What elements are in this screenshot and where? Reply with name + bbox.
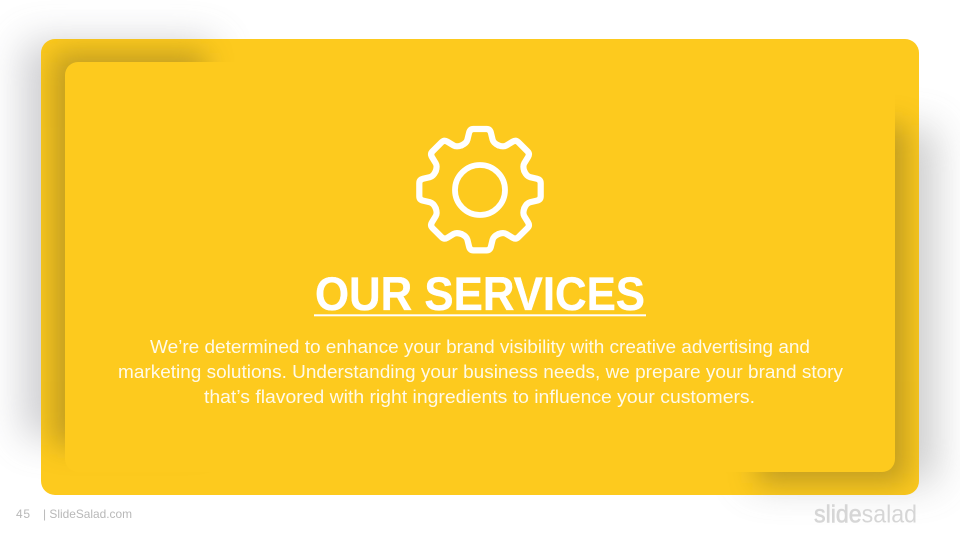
icon: gear [419,129,541,250]
logo: slidesalad: slidesalad [814,500,917,528]
panel: outer yellow card [41,39,919,495]
body text: that’s flavored with right ingredients to influence your customers. [204,386,755,407]
footer: page number: 45 [16,507,30,521]
footer: site name: | SlideSalad.com [43,507,132,521]
body text: marketing solutions. Understanding your business needs, we prepare your brand story [118,361,844,382]
outer card drop shadows [24,42,936,483]
panel: inner yellow card [65,62,895,472]
body text [118,336,844,407]
body text: We’re determined to enhance your brand visibility with creative advertising and [150,336,810,357]
title: OUR SERVICES [315,267,645,320]
